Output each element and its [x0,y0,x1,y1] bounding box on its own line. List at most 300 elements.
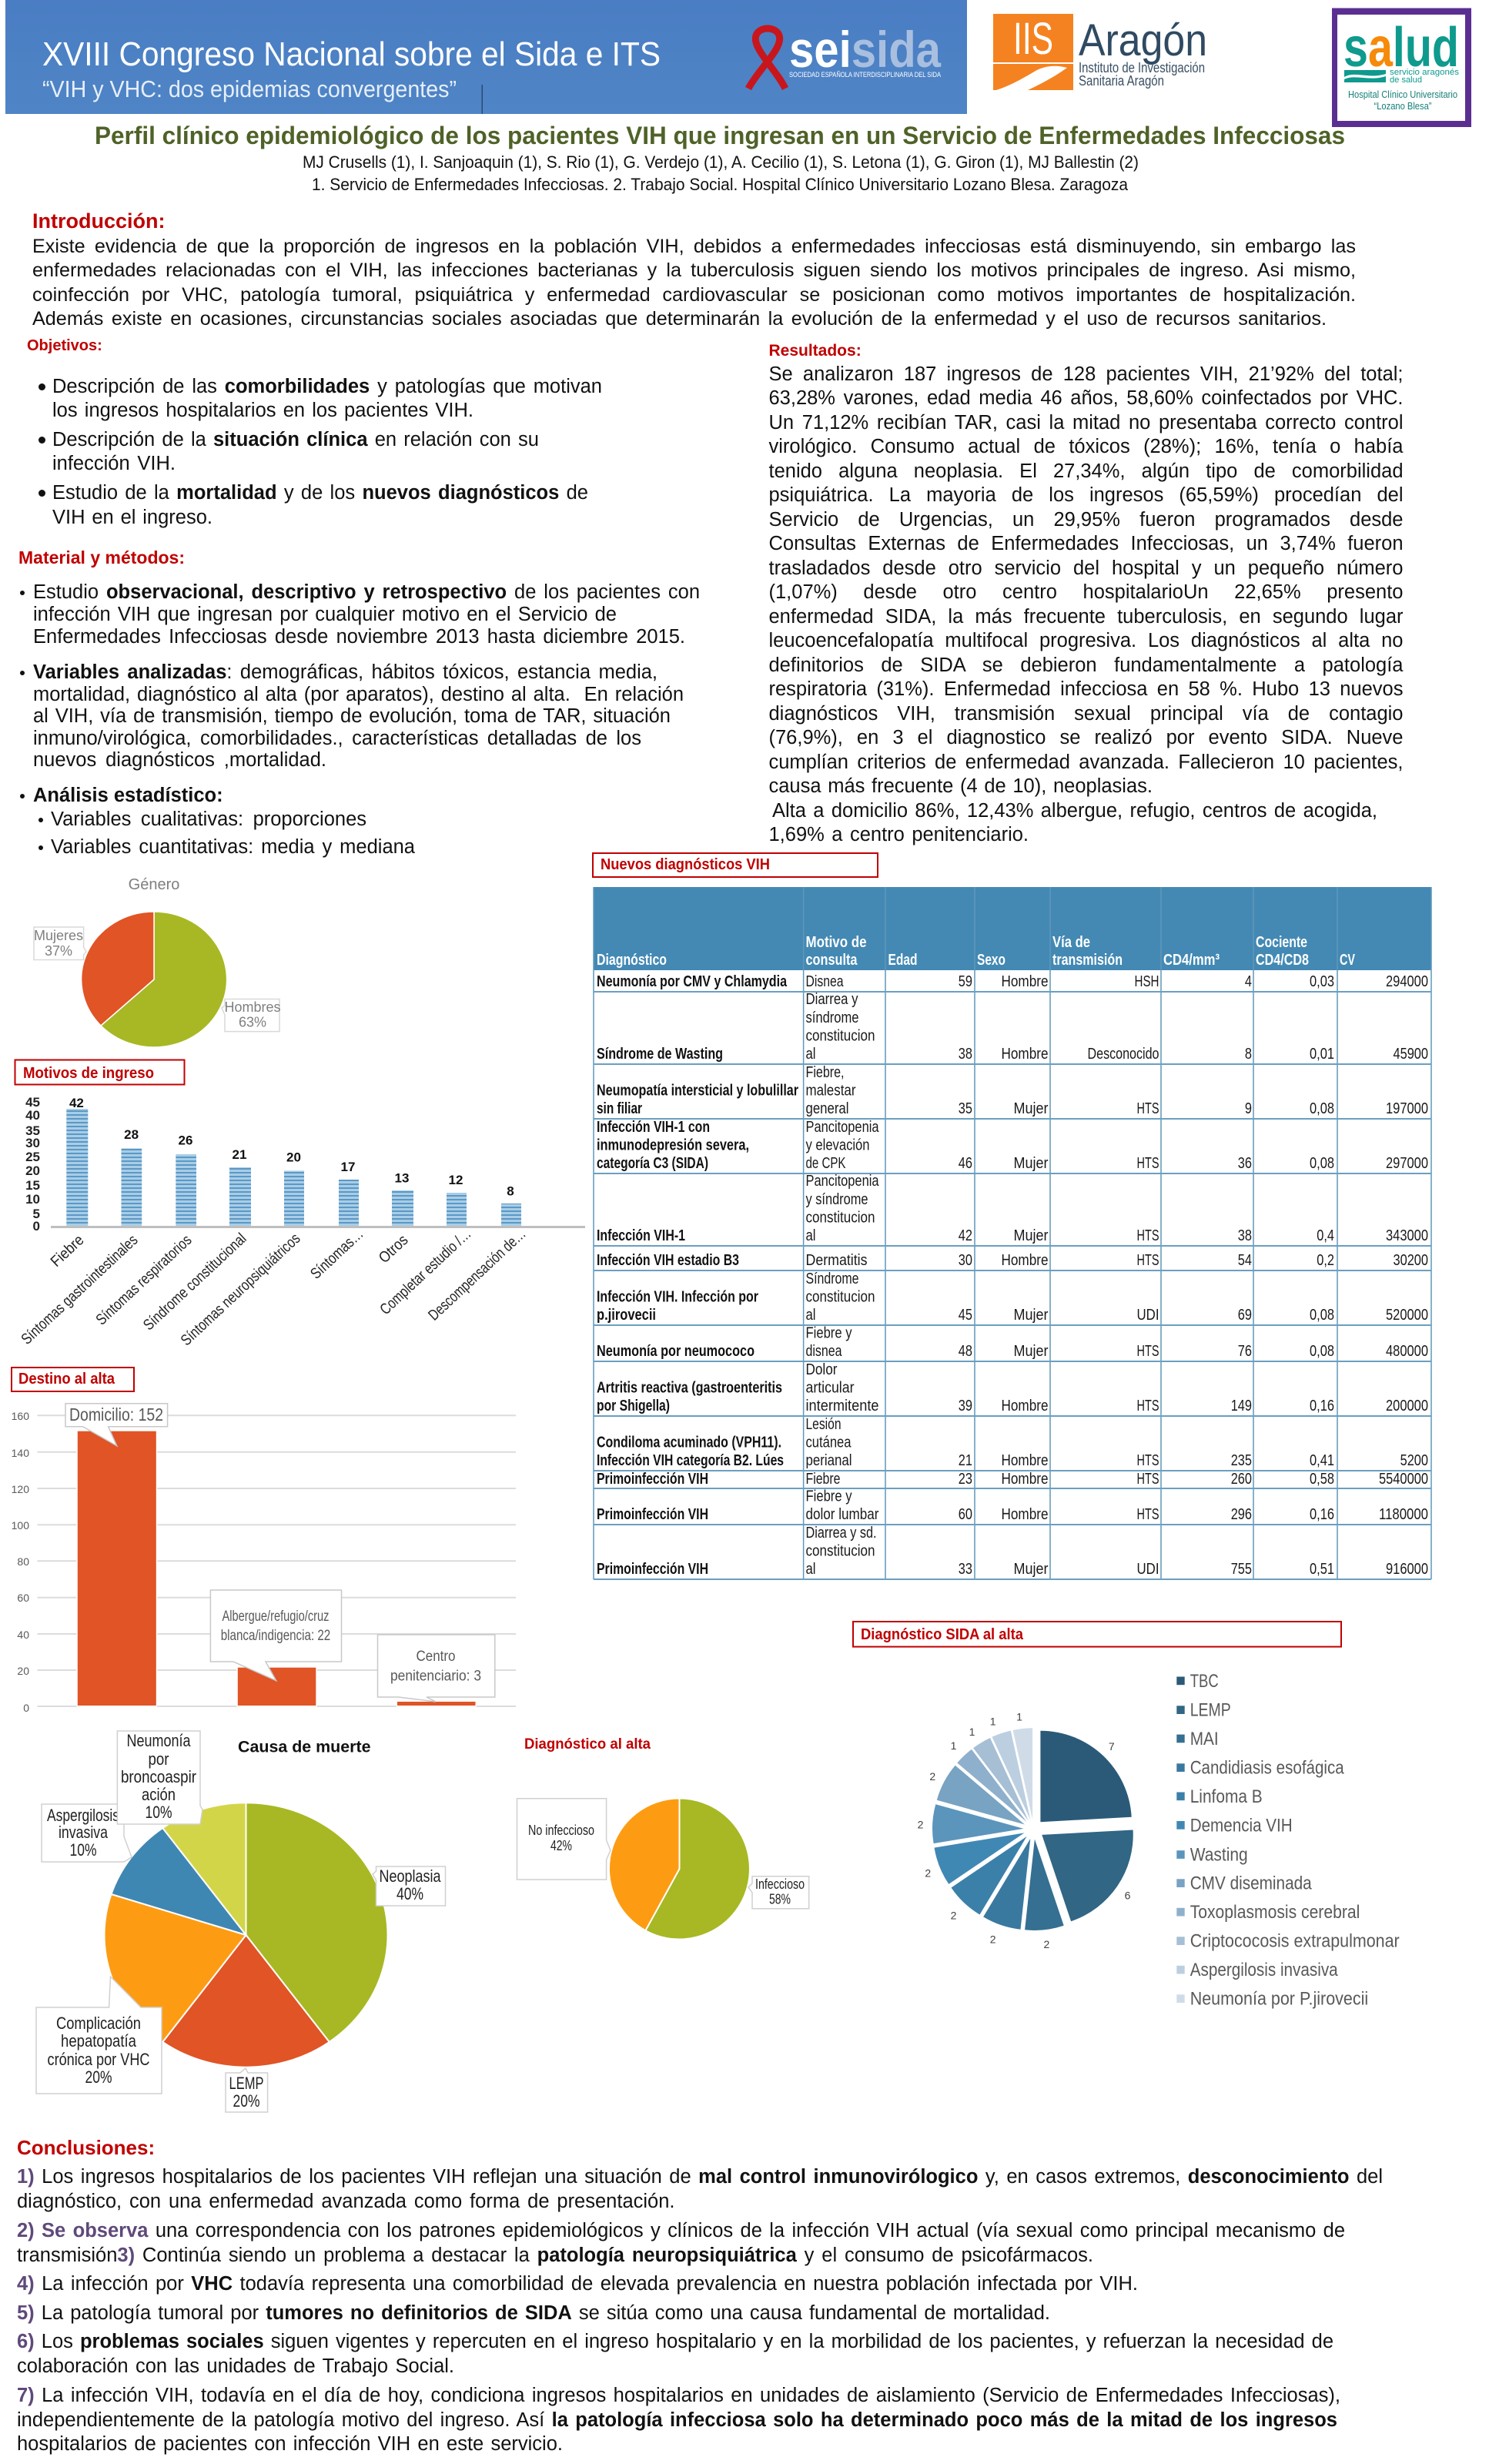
logo: salud: de salud [1390,75,1422,85]
table row 10: HTS [1136,1452,1159,1469]
conclusion 1 [17,2166,1383,2212]
conclusion 5: 5) La patología tumoral por tumores no definitorios de SIDA se sitúa como una causa fundamental de mortalidad. [17,2302,1050,2324]
table row 11: 0,58 [1310,1471,1334,1488]
logo: IIS Aragón: Instituto de Investigación [1079,60,1205,75]
label: neumonía por broncoaspiración [117,1731,202,1824]
table header row: CD4/mm³ [1163,952,1220,969]
panel: nuevos diagnósticos VIH heading [592,852,878,878]
methods: análisis estadístico: Análisis estadístico: [33,785,223,806]
label: hombres: Hombres [224,999,281,1015]
table row 5: 343000 [1386,1227,1428,1244]
table: nuevos diagnósticos VIH [593,887,1432,1580]
table row 13: UDI [1136,1561,1159,1578]
methods: análisis estadístico: Variables cualitativas: proporciones [51,808,366,830]
table row 12: 1180000 [1379,1506,1428,1523]
results text: respiratoria (31%). Enfermedad infecciosa en 58 %. Hubo 13 nuevos [768,678,1403,700]
table row 3: 197000 [1386,1100,1428,1117]
table row 1 [597,973,1428,990]
table row 5: Pancitopenia [805,1173,879,1190]
logo: seisida: SOCIEDAD ESPAÑOLA INTERDISCIPLINARIA DEL SIDA [789,71,941,79]
label: complicación hepatopatía crónica por VHC: crónica por VHC [48,2050,150,2069]
results text: Consultas Externas de Enfermedades Infecciosas, un 3,74% fueron [768,533,1403,554]
table header row: consulta [805,952,858,969]
results text [768,363,1403,845]
table row 2: 45900 [1394,1046,1428,1063]
data labels: 20 [286,1150,301,1165]
conclusion 6: colaboración con las unidades de Trabajo Social. [17,2355,454,2377]
results text: enfermedad SIDA, la más frecuente tuberculosis, en segundo lugar [768,605,1403,627]
data labels: 17 [341,1160,355,1174]
data labels: 2 [1044,1938,1050,1950]
table row 4: y elevación [805,1137,870,1153]
legend: diagnóstico SIDA: Wasting [1190,1845,1248,1866]
table row 13: 916000 [1386,1561,1428,1578]
table row 1: Neumonía por CMV y Chlamydia [597,973,788,990]
logo: IIS Aragón: Aragón [1079,15,1207,65]
table row 2 [597,991,1428,1063]
bars [66,1109,521,1226]
y axis gridlines and labels: 80 [17,1555,29,1568]
data labels: 2 [925,1866,931,1879]
table row 10: Condiloma acuminado (VPH11). [597,1434,781,1451]
table row 13: Mujer [1013,1561,1049,1578]
objectives list: VIH en el ingreso. [52,507,212,528]
table row 4: 36 [1238,1155,1252,1172]
table row 12: HTS [1136,1506,1159,1523]
table row 6: 0,2 [1317,1252,1334,1269]
table row 7: UDI [1136,1307,1159,1324]
bar chart: motivos de ingreso [18,1095,585,1349]
panel: introducción [32,209,1356,330]
y axis labels: 25 [25,1150,40,1164]
label: no infeccioso: 42% [550,1838,572,1853]
methods: variables analizadas [20,661,684,771]
slice: hombres [101,912,227,1047]
table row 1: 0,03 [1310,973,1334,990]
methods: variables analizadas: Variables analizadas: demográficas, hábitos tóxicos, estancia media, [33,661,658,682]
table row 9: por Shigella) [597,1398,670,1414]
table row 3: general [805,1100,848,1117]
legend: diagnóstico SIDA: Aspergilosis invasiva [1190,1960,1338,1980]
table row 4: Pancitopenia [805,1119,879,1136]
table row 7: Síndrome [805,1270,859,1287]
table row 7: 520000 [1386,1307,1428,1324]
methods: variables analizadas: mortalidad, diagnóstico al alta (por aparatos), destino al alta. En relación [33,684,684,705]
table row 8 [597,1324,1428,1360]
label: aspergilosis invasiva: 10% [69,1840,97,1860]
logo: salud [1332,8,1471,127]
results text: definitorios de SIDA se debieron fundamentalmente a patología [768,654,1403,676]
conclusions 2 and 3: 2) Se observa una correspondencia con los patrones epidemiológicos y clínicos de la infección VIH actual (vía sexual como principal mecanismo de [17,2220,1345,2241]
table row 6: HTS [1136,1252,1159,1269]
legend: diagnóstico SIDA: Criptococosis extrapulmonar [1190,1931,1400,1952]
panel: resultados [768,342,1403,845]
table header row: Diagnóstico [597,952,667,969]
table row 11: Fiebre [805,1471,841,1488]
table header row: Motivo de [805,934,867,951]
y axis gridlines and labels: 60 [17,1592,29,1604]
table row 10: cutánea [805,1434,852,1451]
callout: centro penitenciario [377,1635,495,1702]
y axis gridlines and labels: 140 [12,1447,29,1459]
heading: diagnóstico SIDA al alta: Diagnóstico SIDA al alta [861,1626,1024,1643]
table row 3: Mujer [1013,1100,1049,1117]
table row 10: 21 [959,1452,972,1469]
table row 3: Fiebre, [805,1064,844,1081]
table row 6: 30200 [1394,1252,1428,1269]
table row 1: HSH [1135,973,1159,990]
table row 5 [597,1173,1428,1244]
heading: introducción: Introducción: [32,209,165,233]
table row 11: Primoinfección VIH [597,1471,708,1488]
table row 5: Infección VIH-1 [597,1227,685,1244]
label: infeccioso [748,1876,809,1909]
table row 11: 260 [1231,1471,1252,1488]
table row 5: 0,4 [1317,1227,1334,1244]
callout: albergue [210,1590,342,1681]
methods: estudio: infección VIH que ingresan por cualquier motivo en el Servicio de [33,604,617,625]
data labels [918,1711,1131,1950]
table row 3: 35 [959,1100,972,1117]
table row 9: 149 [1231,1398,1252,1414]
table row 10: 5200 [1400,1452,1428,1469]
pie chart: causa de muerte [35,1730,447,2113]
label: mujeres: Mujeres [34,928,83,943]
table row 7: Mujer [1013,1307,1049,1324]
exploded pie chart: diagnóstico SIDA al alta [918,1711,1133,1950]
callout: centro penitenciario: penitenciario: 3 [390,1669,481,1685]
legend: diagnóstico SIDA: CMV diseminada [1190,1873,1312,1894]
table row 8: 480000 [1386,1343,1428,1360]
table row 7: p.jirovecii [597,1307,656,1324]
table row 4 [597,1119,1428,1172]
conclusion 7: hospitalarios de pacientes con infección VIH en este servicio. [17,2433,563,2455]
slices [609,1799,750,1939]
y axis labels: 40 [25,1108,40,1123]
results text: virológico. Consumo actual de tóxicos (28%); 16%, tenía o había [768,436,1403,457]
table row 6: Hombre [1001,1252,1049,1269]
callout: domicilio [65,1404,168,1446]
bar: albergue [238,1668,316,1706]
results text: psiquiátrica. La mayoria de los ingresos (65,59%) procedían del [768,484,1403,506]
table row 9: 0,16 [1310,1398,1334,1414]
table row 3: Neumopatía intersticial y lobulillar [597,1082,798,1099]
methods: análisis estadístico: Variables cuantitativas: media y mediana [51,836,415,858]
table row 13: Primoinfección VIH [597,1561,708,1578]
legend: diagnóstico SIDA: Demencia VIH [1190,1815,1293,1836]
table row 3: 9 [1245,1100,1252,1117]
table row 1: Disnea [805,973,844,990]
methods: estudio: Enfermedades Infecciosas desde noviembre 2013 hasta diciembre 2015. [33,626,685,648]
table row 12: Primoinfección VIH [597,1506,708,1523]
table row 4: inmunodepresión severa, [597,1137,749,1153]
table row 8: HTS [1136,1343,1159,1360]
results text: (76,9%), en 3 el diagnostico se realizó por evento SIDA. Nueve [768,727,1403,748]
table header row: CD4/CD8 [1256,952,1309,969]
category labels: Fiebre [48,1232,87,1270]
data labels: 2 [918,1819,924,1831]
table row 7 [597,1270,1428,1324]
conclusions 2 and 3: transmisión3) Continúa siendo un problema a destacar la patología neuropsiquiátrica y el consumo de psicofármacos. [17,2245,1093,2266]
logo: salud: servicio aragonés [1390,68,1460,77]
table row 10: Hombre [1001,1452,1049,1469]
table row 8: 76 [1238,1343,1252,1360]
label: LEMP [226,2068,268,2112]
y axis gridlines and labels [12,1410,516,1714]
y axis gridlines and labels: 20 [17,1665,29,1677]
label: neumonía por broncoaspiración: ación [142,1785,176,1804]
table row 5: al [805,1227,816,1244]
table row 4: categoría C3 (SIDA) [597,1155,708,1172]
results text: Servicio de Urgencias, un 29,95% fueron programados desde [768,508,1403,530]
header banner: congress [5,0,967,114]
table header row: Vía de [1052,934,1090,951]
logo: IIS Aragón [993,14,1207,90]
table row 11: HTS [1136,1471,1159,1488]
table row 5: y síndrome [805,1191,868,1208]
callout: centro penitenciario: Centro [416,1649,456,1665]
heading: material y métodos: Material y métodos: [18,547,185,567]
data labels: 2 [990,1933,996,1946]
methods: variables analizadas: nuevos diagnósticos ,mortalidad. [33,749,326,771]
label: infeccioso: Infeccioso [755,1876,805,1892]
table row 2: 0,01 [1310,1046,1334,1063]
table row 7: 45 [959,1307,972,1324]
category labels: Síntomas… [307,1226,366,1283]
table row 9: HTS [1136,1398,1159,1414]
table row 10 [597,1416,1428,1469]
table row 13 [597,1525,1428,1578]
data labels: 1 [951,1739,957,1752]
label: complicación hepatopatía crónica por VHC: Complicación [56,2014,141,2033]
pie chart: género [33,876,281,1047]
y axis gridlines and labels: 120 [12,1483,29,1495]
conclusion 1: 1) Los ingresos hospitalarios de los pacientes VIH reflejan una situación de mal control inmunovirólogico y, en casos extremos, desconocimiento del [17,2166,1383,2188]
table row 5: Mujer [1013,1227,1049,1244]
table row 2: al [805,1046,816,1063]
results text: Se analizaron 187 ingresos de 128 pacientes VIH, 21’92% del total; [768,363,1403,385]
y axis labels [25,1095,40,1234]
data labels: 28 [124,1127,139,1142]
results text: 1,69% a centro penitenciario. [768,824,1029,845]
logo: salud: salud [1343,17,1459,79]
data labels [69,1096,514,1199]
table row 9: Artritis reactiva (gastroenteritis [597,1379,782,1396]
table row 13: al [805,1561,816,1578]
objectives list [38,376,602,528]
table row 9: intermitente [805,1398,879,1414]
table row 3 [597,1064,1428,1117]
callout: domicilio: Domicilio: 152 [69,1404,163,1424]
table row 12: Fiebre y [805,1488,852,1505]
methods: análisis estadístico [20,785,415,858]
table row 3: sin filiar [597,1100,642,1117]
y axis gridlines and labels: 40 [17,1629,29,1641]
label: mujeres [34,927,86,959]
table row 12 [597,1488,1428,1523]
legend: diagnóstico SIDA: Neumonía por P.jirovecii [1190,1989,1368,2010]
table row 2: síndrome [805,1009,859,1026]
results text: trasladados desde otro servicio del hospital y un pequeño número [768,557,1403,579]
data labels: 2 [929,1770,935,1783]
table row 10: Lesión [805,1416,841,1433]
slices [932,1728,1133,1930]
category labels: Síndrome constitucional [140,1230,249,1334]
table row 4: 297000 [1386,1155,1428,1172]
table row 12: dolor lumbar [805,1506,879,1523]
table row 10: Infección VIH categoría B2. Lúes [597,1452,784,1469]
table row 9: 39 [959,1398,972,1414]
label: hombres: 63% [239,1015,266,1030]
objectives list: Estudio de la mortalidad y de los nuevos diagnósticos de [52,482,588,504]
table row 6: Dermatitis [805,1252,867,1269]
table row 7: 0,08 [1310,1307,1334,1324]
category labels: Síntomas neuropsiquiátricos [178,1230,303,1349]
congress subtitle: “VIH y VHC: dos epidemias convergentes” [42,75,457,102]
table row 2: Síndrome de Wasting [597,1046,723,1063]
table row 4: de CPK [805,1155,846,1172]
category labels: Descompensación de… [425,1226,529,1324]
table row 5: 38 [1238,1227,1252,1244]
table row 4: HTS [1136,1155,1159,1172]
logo: salud: “Lozano Blesa” [1374,100,1432,112]
chart title: causa de muerte: Causa de muerte [238,1739,371,1756]
table row 9: 200000 [1386,1398,1428,1414]
objectives list: infección VIH. [52,453,176,474]
table row 12: 60 [959,1506,972,1523]
heading: destino al alta [11,1367,135,1392]
legend: diagnóstico SIDA: Linfoma B [1190,1786,1263,1807]
table row 11 [597,1471,1428,1488]
affiliations: 1. Servicio de Enfermedades Infecciosas. 2. Trabajo Social. Hospital Clínico Universitario Lozano Blesa. Zaragoza [312,175,1129,194]
label: LEMP: LEMP [229,2074,263,2093]
table header row: Edad [888,952,918,969]
label: neoplasia [373,1866,445,1906]
label: aspergilosis invasiva: invasiva [59,1823,109,1842]
table row 3: HTS [1136,1100,1159,1117]
table row 13: constitucion [805,1542,875,1559]
label: hombres [222,999,281,1032]
callout: albergue: blanca/indigencia: 22 [221,1628,330,1644]
data labels: 21 [233,1147,246,1162]
table row 10: 235 [1231,1452,1252,1469]
table row 8: disnea [805,1343,842,1360]
panel: material y métodos [18,547,700,858]
chart title: diagnóstico al alta: Diagnóstico al alta [524,1736,651,1753]
table row 10: perianal [805,1452,852,1469]
heading: diagnóstico SIDA al alta [852,1621,1342,1648]
data labels: 42 [69,1096,84,1110]
methods: estudio [20,581,700,648]
heading: resultados: Resultados: [768,342,862,360]
y axis labels: 20 [25,1163,40,1178]
label: neumonía por broncoaspiración: por [148,1749,169,1769]
label: no infeccioso [517,1799,611,1880]
authors: MJ Crusells (1), I. Sanjoaquin (1), S. Rio (1), G. Verdejo (1), A. Cecilio (1), S. Letona (1), G. Giron (1), MJ Ballestin (2) [303,152,1139,172]
table row 4: Mujer [1013,1155,1049,1172]
results text: Un 71,12% recibían TAR, casi la mitad no presentaba correcto control [768,411,1403,433]
data labels: 12 [449,1173,463,1187]
label: neoplasia: Neoplasia [379,1866,441,1886]
table row 11: Hombre [1001,1471,1049,1488]
label: no infeccioso: No infeccioso [528,1823,594,1838]
table row 2: Diarrea y [805,991,858,1008]
panel: objetivos [27,337,602,528]
y axis gridlines and labels: 100 [12,1519,29,1532]
conclusion 6 [17,2331,1333,2377]
category labels: Síntomas respiratorios [93,1232,195,1328]
y axis labels: 45 [25,1095,40,1110]
results text: causa más frecuente (4 de 10), neoplasias. [768,775,1153,797]
heading: motivos de ingreso: Motivos de ingreso [23,1065,154,1082]
methods: variables analizadas: inmuno/virológica, comorbilidades., características detalladas de los [33,727,641,748]
callout: albergue: Albergue/refugio/cruz [222,1609,330,1625]
congress title: XVIII Congreso Nacional sobre el Sida e ITS [42,35,661,73]
logo: IIS Aragón: IIS [1013,14,1053,64]
bar: domicilio [78,1431,156,1706]
table row 5: 42 [959,1227,972,1244]
results text: (1,07%) desde otro centro hospitalarioUn 22,65% presento [768,581,1403,603]
table row 8: Neumonía por neumococo [597,1343,755,1360]
table row 8: Fiebre y [805,1324,852,1341]
conclusion 1: diagnóstico, con una enfermedad avanzada como forma de presentación. [17,2191,674,2212]
table row 1: 294000 [1386,973,1428,990]
y axis gridlines and labels: 0 [23,1702,29,1714]
conclusion 4: 4) La infección por VHC todavía representa una comorbilidad de elevada prevalencia en nuestra población infectada por VIH. [17,2273,1138,2295]
category labels: Completar estudio /… [377,1226,474,1318]
table row 11: 5540000 [1379,1471,1428,1488]
table row 3: malestar [805,1082,856,1099]
results text: 63,28% varones, edad media 46 años, 58,60% coinfectados por VHC. [768,387,1403,409]
table row 5: constitucion [805,1209,875,1226]
logo: IIS Aragón: Sanitaria Aragón [1079,73,1164,89]
conclusion 7: independientemente de la patología motivo del ingreso. Así la patología infecciosa solo ha determinado poco más de la mitad de los ingresos [17,2409,1337,2431]
conclusion 6: 6) Los problemas sociales siguen vigentes y repercuten en el ingreso hospitalario y en la morbilidad de los pacientes, y refuerzan la necesidad de [17,2331,1333,2352]
panel: conclusiones [17,2136,1383,2455]
heading: destino al alta: Destino al alta [18,1371,115,1388]
bar chart: destino al alta [12,1403,516,1714]
data labels: 1 [990,1716,996,1728]
logo: seisida: seisida [789,21,942,78]
y axis labels: 5 [33,1207,40,1221]
table row 13: 0,51 [1310,1561,1334,1578]
table row 6: 30 [959,1252,972,1269]
data labels: 6 [1125,1889,1131,1901]
category labels: Síntomas gastrointestinales [18,1232,141,1348]
data labels: 8 [507,1184,514,1199]
table row 12: 296 [1231,1506,1252,1523]
table row 9: Hombre [1001,1398,1049,1414]
title and authors [95,122,1345,194]
y axis labels: 10 [25,1192,40,1207]
table row 13: Diarrea y sd. [805,1525,876,1542]
chart title: género: Género [129,876,179,893]
table row 13: 33 [959,1561,972,1578]
legend: diagnóstico SIDA: MAI [1190,1729,1219,1749]
table row 2: constitucion [805,1027,875,1044]
main title: Perfil clínico epidemiológico de los pacientes VIH que ingresan en un Servicio de Enfermedades Infecciosas [95,122,1345,149]
table row 12: Hombre [1001,1506,1049,1523]
pie chart: diagnóstico al alta [516,1736,810,1939]
icon: red ribbon [748,28,785,89]
table row 7: constitucion [805,1288,875,1305]
methods: variables analizadas: al VIH, vía de transmisión, tiempo de evolución, toma de TAR, situación [33,705,671,727]
label: aspergilosis invasiva: Aspergilosis [47,1806,119,1825]
table header row [597,934,1355,969]
table row 12: 0,16 [1310,1506,1334,1523]
table row 1: 4 [1245,973,1252,990]
category labels [18,1226,529,1349]
